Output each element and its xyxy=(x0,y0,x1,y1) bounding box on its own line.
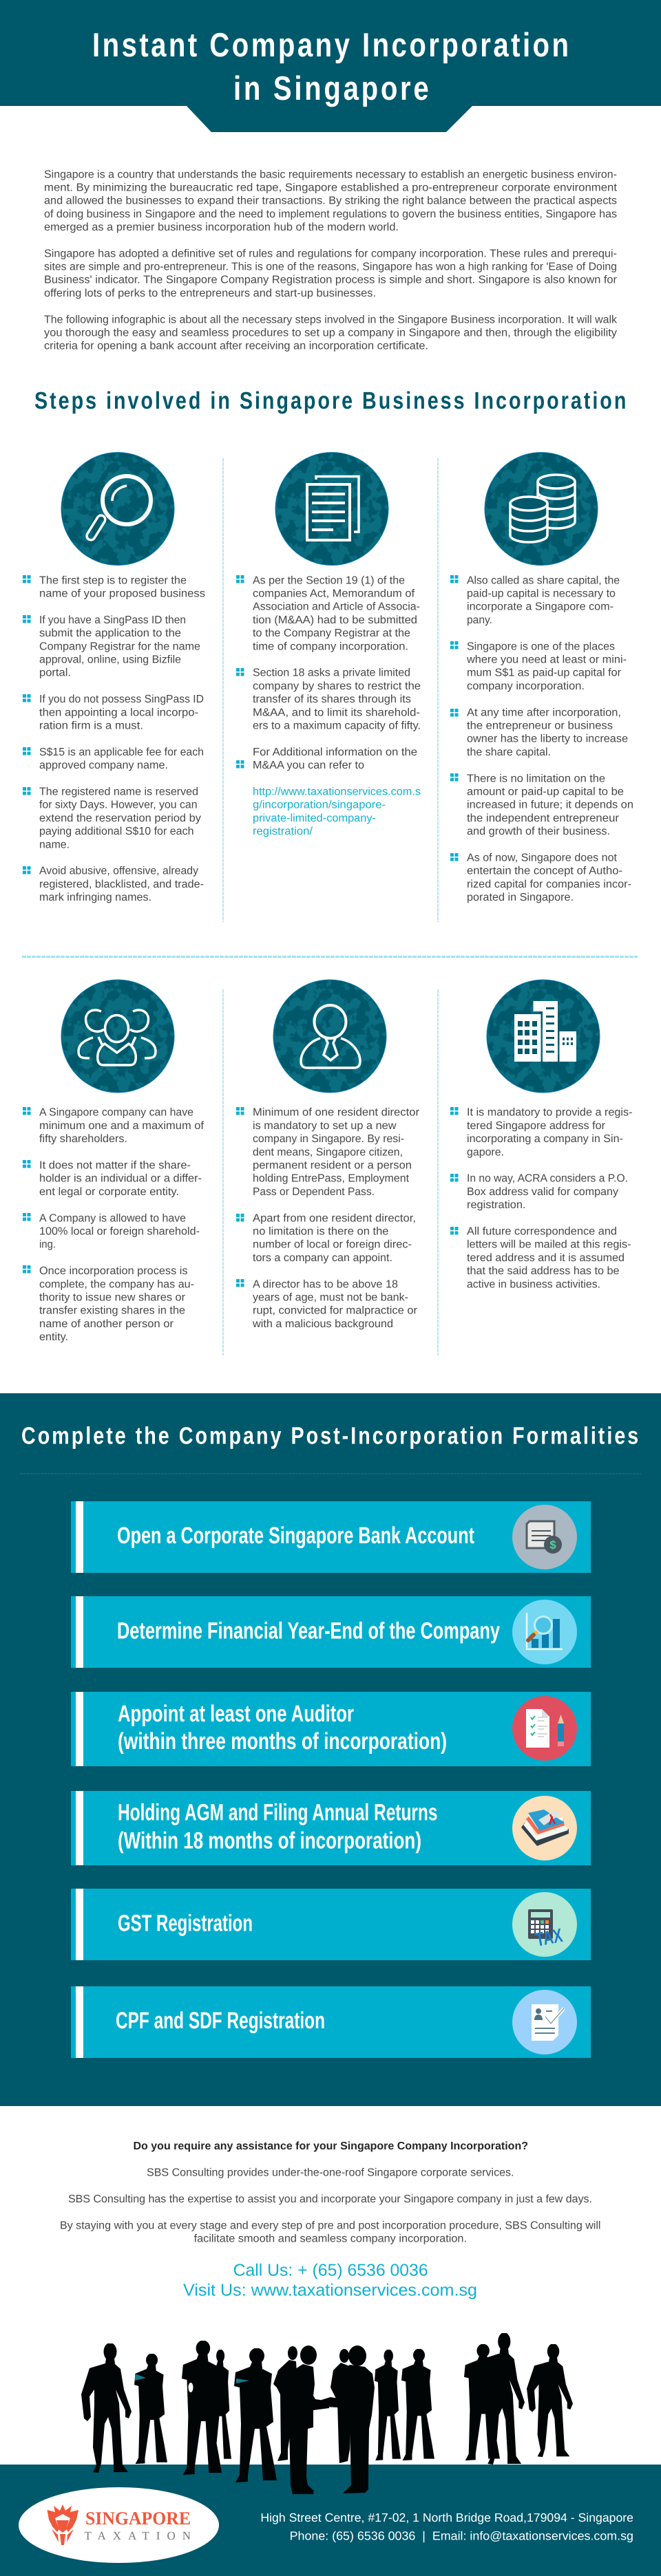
text column: shareholders: fifty shareholders. xyxy=(39,1133,127,1145)
intro text: criteria for opening a bank account after receiving an incorporation certificate. xyxy=(44,341,428,352)
text column: shareholders: thority to issue new shares or xyxy=(39,1292,186,1303)
icon: tax calculator xyxy=(512,1892,577,1957)
logo: Singapore Taxation: SINGAPORE xyxy=(85,2508,191,2529)
text column: share capital: incorporate a Singapore com- xyxy=(467,601,613,613)
icon: bank document: $ xyxy=(549,1538,556,1552)
text column: shareholders xyxy=(23,1107,204,1343)
text column: director: rupt, convicted for malpractice or xyxy=(253,1305,418,1317)
assistance text: Do you require any assistance for your Singapore Company Incorporation? xyxy=(134,2140,528,2152)
text column: shareholders: ing. xyxy=(39,1239,56,1251)
icon: tax calculator: TAX xyxy=(534,1924,565,1951)
card: CPF and SDF registration: CPF and SDF Registration xyxy=(116,2008,325,2034)
card: financial year-end: Determine Financial Year-End of the Company xyxy=(117,1618,500,1644)
text column: registered address: letters will be mailed at this regis- xyxy=(467,1239,631,1251)
text column: share capital: mum S$1 as paid-up capital for xyxy=(467,667,622,679)
text column: memorandum: time of company incorporation. xyxy=(253,641,408,652)
card: CPF and SDF registration xyxy=(71,1986,591,2058)
intro text: Business' indicator. The Singapore Company Registration process is simple and short. Singapore is also known for xyxy=(44,275,618,286)
text column: director: years of age, must not be bank- xyxy=(253,1292,408,1303)
card: AGM and annual returns xyxy=(71,1791,591,1865)
text column: shareholders: transfer existing shares in the xyxy=(39,1305,185,1317)
text column: memorandum: M&AA, and to limit its sharehold- xyxy=(253,707,420,718)
intro text: and allowed the businesses to expand their transactions. By striking the right balance between the practical aspects xyxy=(44,195,617,207)
text column: memorandum: Section 18 asks a private limited xyxy=(253,667,410,679)
text column: shareholders: Once incorporation process is xyxy=(39,1265,187,1277)
footer contact details: Phone: (65) 6536 0036 | Email: info@taxationservices.com.sg xyxy=(290,2529,633,2543)
heading: formalities: Complete the Company Post-Incorporation Formalities xyxy=(21,1423,638,1450)
text column: share capital: paid-up capital is necessary to xyxy=(467,588,616,600)
text column: shareholders: A Company is allowed to have xyxy=(39,1212,186,1224)
text column: name registration: Company Registrar for the name xyxy=(39,641,200,652)
card: auditor: (within three months of incorporation) xyxy=(118,1728,447,1754)
text column: memorandum: registration/ xyxy=(253,826,313,837)
intro text: offering lots of perks to the entrepreneurs and start-up businesses. xyxy=(44,288,376,299)
text column: share capital: owner has the liberty to increase xyxy=(467,733,628,745)
header banner xyxy=(0,0,661,132)
text column: name registration: approval, online, using Bizfile xyxy=(39,654,181,666)
footer contact details xyxy=(260,2511,633,2543)
text column: share capital: rized capital for companies incor- xyxy=(467,879,631,890)
text column: director: permanent resident or a person xyxy=(253,1160,412,1171)
text column: share capital: pany. xyxy=(467,614,492,626)
text column: director: Pass or Dependent Pass. xyxy=(253,1186,375,1198)
text column: registered address: tered Singapore address for xyxy=(467,1120,606,1132)
text column: name registration: for sixty Days. However, you can xyxy=(39,799,197,811)
intro text: Singapore is a country that understands the basic requirements necessary to establish an energetic business environ- xyxy=(44,169,617,180)
text column: memorandum: ers to a maximum capacity of fifty. xyxy=(253,720,421,732)
text column: memorandum: company by shares to restrict the xyxy=(253,680,421,692)
text column: registered address: registration. xyxy=(467,1199,526,1211)
icon: registration form xyxy=(512,1990,577,2054)
text column: name registration: mark infringing names. xyxy=(39,892,151,903)
text column: share capital: porated in Singapore. xyxy=(467,892,574,903)
footer contact details: High Street Centre, #17-02, 1 North Bridge Road,179094 - Singapore xyxy=(260,2511,633,2524)
text column: name registration: paying additional S$10 for each xyxy=(39,826,194,837)
text column: name registration: S$15 is an applicable fee for each xyxy=(39,747,204,758)
text column: director: holding EntrePass, Employment xyxy=(253,1173,410,1185)
assistance text: By staying with you at every stage and every step of pre and post incorporation procedure, SBS Consulting will xyxy=(60,2220,600,2232)
text column: director: is mandatory to set up a new xyxy=(253,1120,397,1132)
text column: director: dent means, Singapore citizen, xyxy=(253,1146,403,1158)
text column: memorandum: to the Company Registrar at the xyxy=(253,627,410,639)
text column: registered address: It is mandatory to provide a regis- xyxy=(467,1107,632,1119)
text column: shareholders: 100% local or foreign sharehold- xyxy=(39,1226,200,1237)
text column: share capital: the entrepreneur or business xyxy=(467,720,613,732)
intro text: The following infographic is about all the necessary steps involved in the Singapore Business incorporation. It will walk xyxy=(44,314,618,325)
card: AGM and annual returns: Holding AGM and Filing Annual Returns xyxy=(118,1800,438,1826)
text column: name registration: The first step is to register the xyxy=(39,575,187,586)
icon: lion xyxy=(47,2504,78,2545)
intro text: you thorough the easy and seamless procedures to set up a company in Singapore and then, through the eligibility xyxy=(44,328,617,339)
icon: buildings xyxy=(487,980,600,1093)
text column: director xyxy=(236,1107,420,1330)
assistance text: SBS Consulting provides under-the-one-roof Singapore corporate services. xyxy=(147,2167,514,2179)
text column: share capital: the share capital. xyxy=(467,747,551,758)
intro text: ment. By minimizing the bureaucratic red tape, Singapore established a pro-entrepreneur corporate environment xyxy=(44,182,618,194)
text column: registered address: All future correspondence and xyxy=(467,1226,617,1237)
text column: name registration: approved company name. xyxy=(39,760,168,771)
text column: director: number of local or foreign direc- xyxy=(253,1239,412,1251)
text column: director: A director has to be above 18 xyxy=(253,1278,398,1290)
icon: checklist pencil xyxy=(512,1696,577,1761)
card: auditor: Appoint at least one Auditor xyxy=(118,1701,354,1727)
footer band xyxy=(0,2465,661,2576)
text column: share capital xyxy=(450,575,633,903)
text column: share capital: Singapore is one of the places xyxy=(467,641,615,652)
text column: registered address: incorporating a company in Sin- xyxy=(467,1133,623,1145)
intro text: of doing business in Singapore and the need to implement regulations to govern the business entities, Singapore has xyxy=(44,208,617,220)
text column: shareholders: holder is an individual or a differ- xyxy=(39,1173,202,1185)
text column: shareholders: name of another person or xyxy=(39,1318,174,1330)
text column: memorandum: transfer of its shares through its xyxy=(253,694,411,705)
text column: memorandum: M&AA you can refer to xyxy=(253,760,364,771)
text column: share capital: entertain the concept of Autho- xyxy=(467,866,622,877)
text column: registered address: gapore. xyxy=(467,1146,504,1158)
heading: steps: Steps involved in Singapore Business Incorporation xyxy=(34,387,626,414)
card: AGM and annual returns: (Within 18 months of incorporation) xyxy=(118,1828,421,1854)
text column: share capital: Also called as share capital, the xyxy=(467,575,620,586)
icon: chart magnifier xyxy=(512,1600,577,1664)
text column: name registration: submit the application to the xyxy=(39,627,181,639)
intro text: Singapore has adopted a definitive set of rules and regulations for company incorporation. These rules and prerequi- xyxy=(44,248,617,259)
card: financial year-end xyxy=(71,1596,591,1668)
contact call to action: Visit Us: www.taxationservices.com.sg xyxy=(183,2282,477,2300)
text column: shareholders: A Singapore company can have xyxy=(39,1107,193,1119)
text column: director: company in Singapore. By resi- xyxy=(253,1133,404,1145)
contact call to action: Call Us: + (65) 6536 0036 xyxy=(233,2262,428,2280)
text column: name registration: The registered name is reserved xyxy=(39,786,198,798)
text column: memorandum: tion (M&AA) had to be submitted xyxy=(253,614,417,626)
text column: director: no limitation is there on the xyxy=(253,1226,389,1237)
text column: director: tors a company can appoint. xyxy=(253,1252,392,1264)
text column: director: Minimum of one resident director xyxy=(253,1107,420,1119)
intro text: sites are simple and pro-entrepreneur. This is one of the reasons, Singapore has won a high ranking for 'Ease of Doing xyxy=(44,261,617,272)
text column: share capital: At any time after incorporation, xyxy=(467,707,621,718)
text column: name registration: ration firm is a must. xyxy=(39,720,143,732)
text column: memorandum: g/incorporation/singapore- xyxy=(253,799,386,811)
text column: share capital: amount or paid-up capital to be xyxy=(467,786,624,798)
title: Instant Company Incorporation xyxy=(92,27,569,64)
text column: registered address: active in business activities. xyxy=(467,1278,600,1290)
title xyxy=(92,27,569,107)
text column: name registration: extend the reservation period by xyxy=(39,813,201,824)
text column: memorandum: As per the Section 19 (1) of the xyxy=(253,575,405,586)
text column: memorandum xyxy=(236,575,421,837)
text column: name registration: portal. xyxy=(39,667,71,679)
card: GST registration xyxy=(71,1889,591,1960)
card: GST registration: GST Registration xyxy=(118,1911,253,1937)
icon: coins xyxy=(485,453,598,566)
intro text xyxy=(44,169,618,352)
text column: memorandum: private-limited-company- xyxy=(253,813,376,824)
text column: name registration: name of your proposed business xyxy=(39,588,205,600)
text column: shareholders: complete, the company has au- xyxy=(39,1278,194,1290)
text column: memorandum: http://www.taxationservices.com.s xyxy=(253,786,421,798)
assistance text: facilitate smooth and seamless company incorporation. xyxy=(194,2233,467,2245)
column dividers xyxy=(223,458,438,1355)
text column: name registration: If you do not possess SingPass ID xyxy=(39,694,204,705)
text column: registered address: In no way, ACRA considers a P.O. xyxy=(467,1173,628,1185)
intro text: emerged as a premier business incorporation hub of the modern world. xyxy=(44,222,399,233)
text column: share capital: increased in future; it depends on xyxy=(467,799,633,811)
text column: director: Apart from one resident director, xyxy=(253,1212,416,1224)
text column: director: with a malicious background xyxy=(252,1318,393,1330)
text column: memorandum: For Additional information on the xyxy=(253,747,417,758)
text column: share capital: where you need at least or mini- xyxy=(466,654,627,666)
logo: Singapore Taxation: TAXATION xyxy=(84,2529,191,2542)
title: in Singapore xyxy=(233,70,429,107)
text column: shareholders: minimum one and a maximum of xyxy=(39,1120,204,1132)
text column: registered address: that the said address has to be xyxy=(467,1265,620,1277)
assistance text xyxy=(60,2140,600,2245)
text column: share capital: There is no limitation on the xyxy=(467,773,605,784)
contact call to action xyxy=(183,2262,477,2300)
text column: name registration xyxy=(23,575,205,903)
icon: shareholders xyxy=(61,980,174,1093)
card: bank account xyxy=(71,1501,591,1573)
text column: shareholders: ent legal or corporate entity. xyxy=(39,1186,179,1198)
text column: name registration: registered, blacklisted, and trade- xyxy=(39,879,204,890)
text column: share capital: the independent entrepreneur xyxy=(467,813,620,824)
icon: documents xyxy=(275,453,388,566)
text column: name registration: then appointing a local incorpo- xyxy=(39,707,198,718)
text column: shareholders: It does not matter if the share- xyxy=(39,1160,191,1171)
icon: bank document xyxy=(512,1505,577,1569)
text column: name registration: name. xyxy=(39,839,70,850)
logo: Singapore Taxation xyxy=(19,2487,219,2563)
text column: share capital: company incorporation. xyxy=(467,680,585,692)
text column: share capital: As of now, Singapore does not xyxy=(467,852,618,864)
card: auditor xyxy=(71,1692,591,1766)
text column: shareholders: entity. xyxy=(39,1331,68,1343)
text column: share capital: and growth of their business. xyxy=(467,826,610,837)
text column: registered address: Box address valid for company xyxy=(467,1186,618,1198)
icon: magnifier xyxy=(61,453,174,566)
text column: registered address: tered address and it is assumed xyxy=(467,1252,625,1264)
silhouettes: team xyxy=(81,2332,573,2494)
card: bank account: Open a Corporate Singapore Bank Account xyxy=(117,1523,474,1549)
icon: books xyxy=(512,1796,577,1860)
text column: name registration: If you have a SingPass ID then xyxy=(39,614,186,626)
text column: name registration: Avoid abusive, offensive, already xyxy=(39,866,198,877)
text column: memorandum: Association and Article of Associa- xyxy=(253,601,420,613)
panel: post-incorporation formalities xyxy=(0,1393,661,2106)
text column: memorandum: companies Act, Memorandum of xyxy=(253,588,415,600)
icon: director xyxy=(273,980,386,1093)
text column: registered address xyxy=(450,1107,632,1290)
assistance text: SBS Consulting has the expertise to assist you and incorporate your Singapore company in just a few days. xyxy=(68,2193,592,2205)
